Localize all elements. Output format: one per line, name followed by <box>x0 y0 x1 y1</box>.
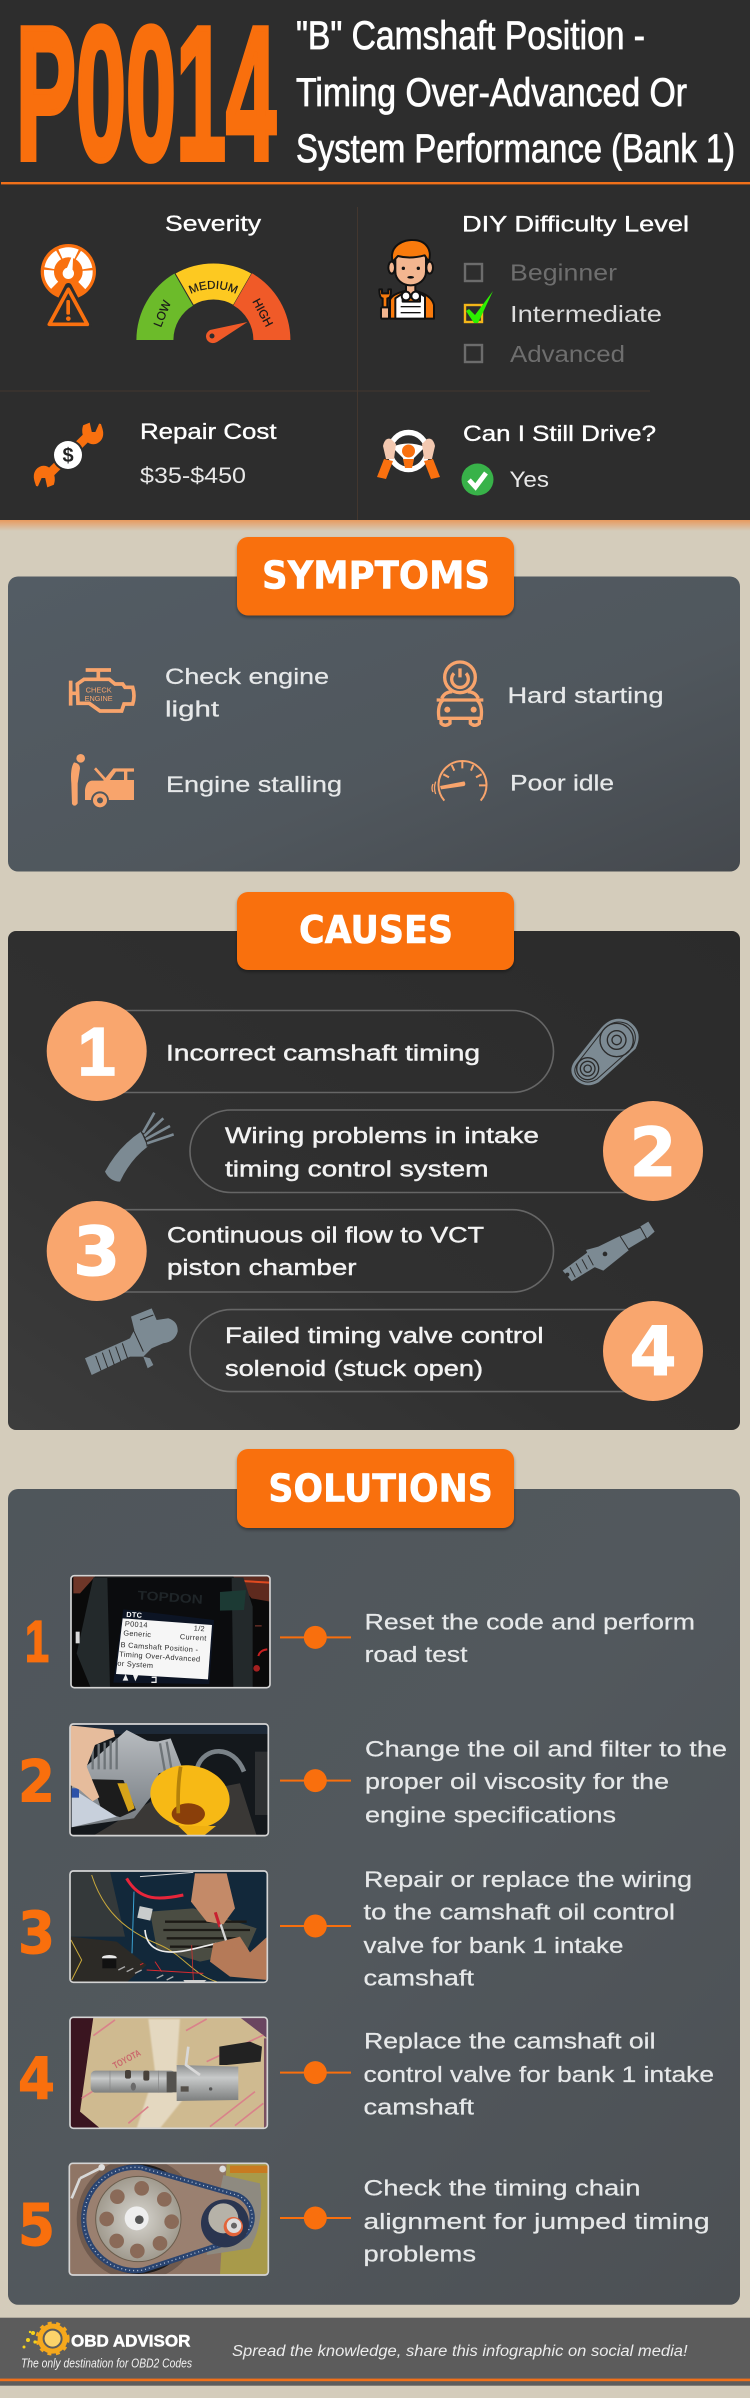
icon: check engine: CHECK <box>86 688 112 695</box>
severity gauge <box>136 264 290 344</box>
solution 3: 3 <box>18 1899 55 1967</box>
cause 3 <box>47 1201 655 1301</box>
icon: gauge with warning <box>41 244 96 325</box>
DIY difficulty block <box>379 212 689 367</box>
icon: timing belt <box>572 1019 638 1085</box>
solution 1: 1 <box>25 1610 49 1674</box>
checkbox: beginner <box>465 260 617 286</box>
photo: scan tool: B Camshaft Position - <box>120 1640 199 1654</box>
title <box>296 14 735 171</box>
cause 2 <box>105 1101 703 1201</box>
solution 5: Check the timing chain <box>364 2175 640 2200</box>
severity gauge: HIGH <box>250 296 276 329</box>
photo: scan tool: P0014 <box>125 1619 148 1630</box>
checkbox: advanced <box>465 341 625 367</box>
cause 4: Failed timing valve control <box>225 1323 544 1348</box>
icon: wrench and dollar <box>35 424 102 486</box>
connector <box>280 1769 351 1792</box>
solution 2: 2 <box>18 1748 55 1816</box>
DIY heading: DIY Difficulty Level <box>462 212 689 236</box>
panel: solutions <box>8 1449 740 2305</box>
solution 5: problems <box>364 2242 476 2266</box>
yes status <box>462 464 549 496</box>
icon: car with power button <box>437 662 483 725</box>
text: check engine light <box>165 664 329 722</box>
icon: wrench and dollar: $ <box>62 445 74 467</box>
solution 3: to the camshaft oil control <box>364 1900 675 1924</box>
solution 2: Change the oil and filter to the <box>365 1736 727 1762</box>
cause 2: Wiring problems in intake <box>225 1123 539 1148</box>
photo: pouring oil <box>70 1724 268 1836</box>
photo: timing chain <box>69 2157 268 2281</box>
solutions tab <box>237 1449 514 1528</box>
title: Timing Over-Advanced Or <box>296 71 687 115</box>
header panel <box>0 0 750 530</box>
text: check engine light: Check engine <box>165 664 329 689</box>
photo: scan tool: or System <box>117 1659 154 1670</box>
checkbox: advanced: Advanced <box>510 341 625 367</box>
text: poor idle: Poor idle <box>510 770 614 796</box>
solution 2: engine specifications <box>365 1803 616 1828</box>
severity block <box>40 211 290 344</box>
icon: check engine: ENGINE <box>85 696 113 703</box>
text: hard starting: Hard starting <box>508 683 664 708</box>
severity gauge: MEDIUM <box>188 280 238 294</box>
solution 4: camshaft <box>364 2095 475 2120</box>
icon: check engine <box>71 670 134 711</box>
severity heading: Severity <box>165 211 261 236</box>
solution 5: 5 <box>18 2191 55 2259</box>
photo: scan tool: Timing Over-Advanced <box>119 1649 201 1664</box>
photo: scan tool: TOPDON <box>137 1588 203 1607</box>
solution 4: control valve for bank 1 intake <box>364 2062 714 2087</box>
solution 3: Repair or replace the wiring <box>364 1867 692 1892</box>
checkbox: beginner: Beginner <box>510 260 617 286</box>
solution 4 <box>18 2017 714 2128</box>
solution 5 <box>18 2157 710 2281</box>
text: check engine light: light <box>165 696 220 722</box>
photo: scan tool: Current <box>180 1632 207 1643</box>
icon: poor idle gauge <box>432 761 486 801</box>
cause 1: Incorrect camshaft timing <box>166 1040 480 1066</box>
causes tab <box>237 892 514 970</box>
severity gauge: LOW <box>151 298 174 329</box>
can I still drive block <box>377 421 656 496</box>
photo: scan tool: 1/2 <box>194 1624 205 1633</box>
photo: control valve <box>70 2017 267 2128</box>
cause 3: 3 <box>73 1213 120 1292</box>
repair cost heading: Repair Cost <box>140 419 276 444</box>
solution 1 <box>25 1576 695 1688</box>
repair cost value: $35-$450 <box>140 463 246 488</box>
solution 2: proper oil viscosity for the <box>365 1769 669 1794</box>
cause 2: timing control system <box>225 1156 488 1182</box>
solution 5: alignment for jumped timing <box>364 2209 710 2234</box>
icon: control valve <box>563 1222 655 1281</box>
solution 3: valve for bank 1 intake <box>364 1933 624 1958</box>
photo: control valve: TOYOTA <box>111 2048 143 2071</box>
cause 2: 2 <box>629 1114 677 1193</box>
share message: Spread the knowledge, share this infographic on social media! <box>232 2343 688 2360</box>
causes tab: CAUSES <box>299 908 453 952</box>
icon: mechanic <box>379 240 434 319</box>
connector <box>280 2061 351 2084</box>
repair cost block <box>35 419 277 488</box>
connector <box>280 1626 351 1649</box>
connector <box>280 1914 351 1938</box>
panel: symptoms <box>8 537 740 872</box>
cause 1: 1 <box>78 1014 116 1090</box>
solution 3: camshaft <box>364 1966 475 1990</box>
panel: causes <box>8 892 740 1430</box>
solution 2 <box>18 1724 727 1836</box>
drive heading: Can I Still Drive? <box>463 421 656 446</box>
solutions tab: SOLUTIONS <box>268 1467 493 1511</box>
cause 3: Continuous oil flow to VCT <box>167 1222 484 1248</box>
solution 4: 4 <box>18 2044 55 2112</box>
cause 4 <box>85 1301 703 1401</box>
cause 3: piston chamber <box>167 1255 357 1280</box>
title: "B" Camshaft Position - <box>296 14 645 58</box>
yes status: Yes <box>510 467 549 492</box>
cause 4: solenoid (stuck open) <box>225 1356 483 1381</box>
logo <box>21 2323 192 2371</box>
photo: scan tool: Generic <box>123 1628 152 1639</box>
footer <box>0 2318 750 2386</box>
checkbox: intermediate <box>465 291 662 327</box>
solution 3 <box>18 1867 692 1990</box>
icon: person and stalled car <box>71 754 134 809</box>
solution 1: road test <box>365 1642 468 1667</box>
icon: wire bundle <box>105 1113 174 1182</box>
photo: wiring repair <box>70 1871 267 1982</box>
symptoms tab <box>237 537 514 616</box>
checkbox: intermediate: Intermediate <box>510 301 662 327</box>
cause 1 <box>47 1001 638 1101</box>
photo: scan tool <box>71 1576 270 1688</box>
icon: steering wheel with hands <box>377 432 440 479</box>
symptoms tab: SYMPTOMS <box>262 554 490 598</box>
cause 4: 4 <box>629 1313 677 1392</box>
connector <box>280 2206 351 2230</box>
logo: The only destination for OBD2 Codes <box>21 2357 192 2371</box>
solution 1: Reset the code and perform <box>365 1609 695 1634</box>
photo: scan tool: DTC <box>126 1610 143 1620</box>
logo: OBD ADVISOR <box>71 2332 190 2351</box>
solution 4: Replace the camshaft oil <box>364 2028 656 2054</box>
text: engine stalling: Engine stalling <box>166 772 342 797</box>
icon: solenoid <box>85 1308 178 1375</box>
